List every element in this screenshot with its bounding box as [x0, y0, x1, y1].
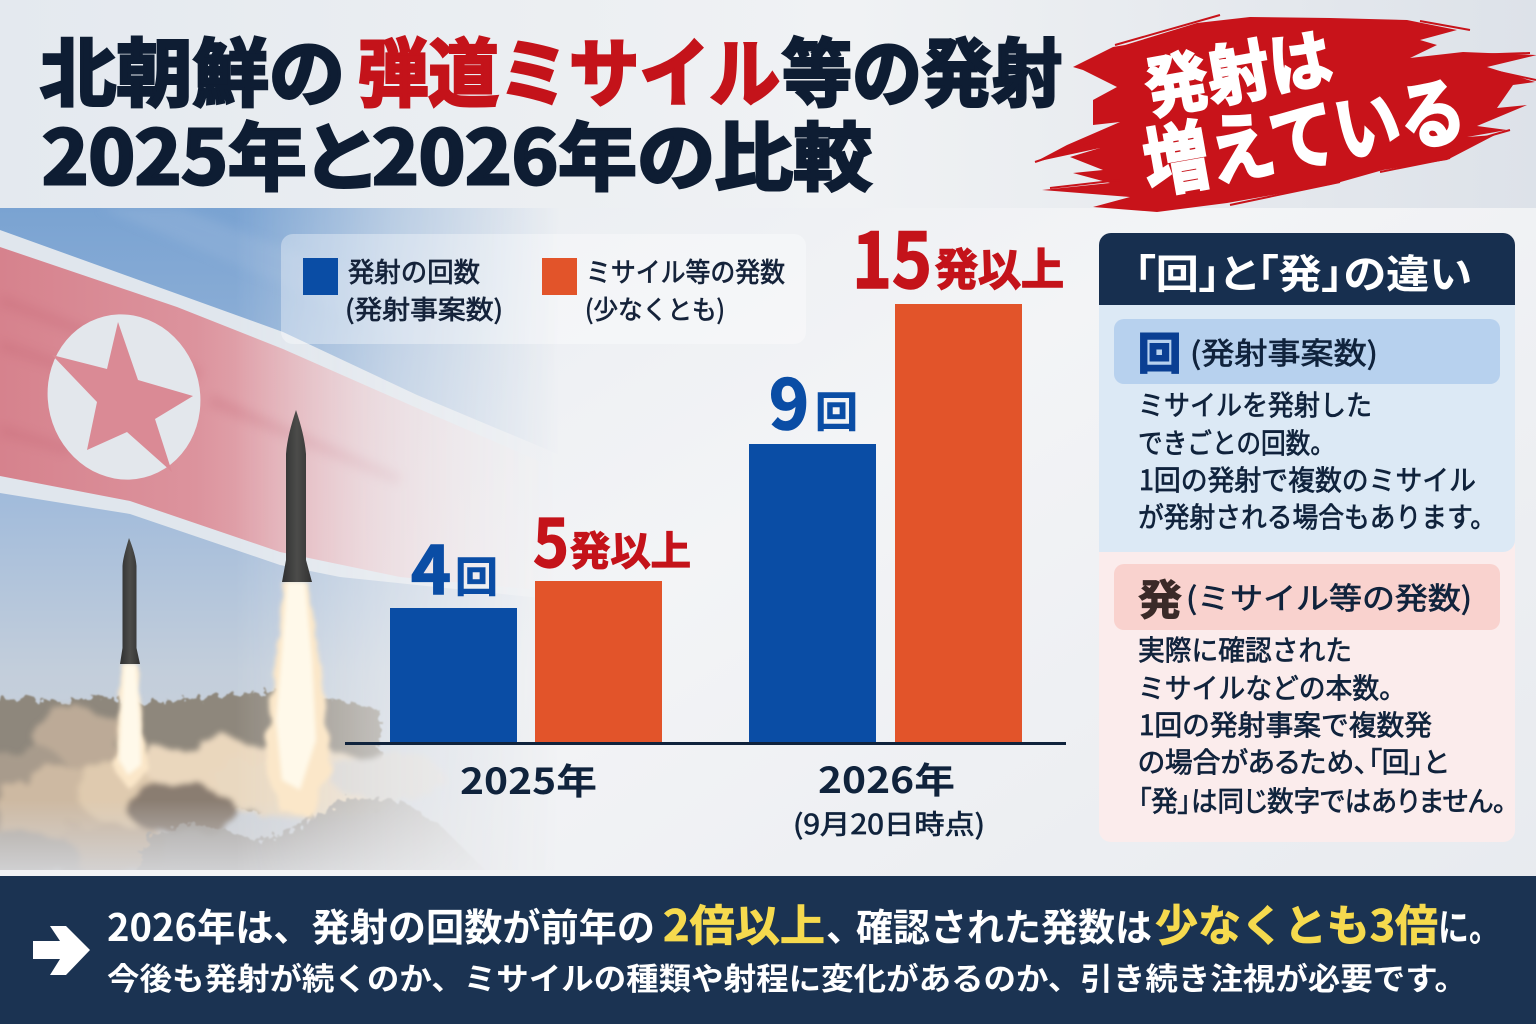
title: 2025年と2026年の比較 — [42, 99, 872, 206]
legend — [281, 234, 806, 344]
text block: 発 definition: 実際に確認された — [1138, 629, 1352, 669]
summary line 1: 2026年は、発射の回数が前年の — [107, 897, 655, 952]
legend: missiles — [542, 251, 785, 327]
text block: 発 definition: の場合があるため、「回」と — [1138, 741, 1448, 781]
subheading: 回: (発射事案数) — [1190, 329, 1378, 373]
axis label: 2026: 2026年 — [818, 752, 955, 804]
treeline — [0, 690, 380, 810]
foreground trees — [138, 794, 452, 870]
bar: 2026 launches — [749, 444, 876, 743]
summary line 2: 今後も発射が続くのか、ミサイルの種類や射程に変化があるのか、引き続き注視が必要です。 — [107, 954, 1467, 999]
title: 弾道ミサイル — [358, 15, 780, 122]
text block: 発 definition: 「発」は同じ数字ではありません。 — [1138, 780, 1506, 820]
callout text: 発射は — [1137, 6, 1339, 133]
panel header — [1099, 233, 1515, 305]
flame: large rocket — [266, 582, 332, 815]
panel header: 「回」と「発」の違い — [1134, 242, 1472, 300]
value: 9回 — [769, 350, 858, 449]
value: 15発以上: 発以上 — [935, 234, 1064, 298]
subheading: 発: (ミサイル等の発数) — [1186, 574, 1472, 618]
text block: 発 definition — [1138, 629, 1506, 820]
panel: difference between 回 and 発 — [1099, 233, 1515, 842]
section: 発 — [1114, 564, 1506, 820]
photo: flag and missile launch — [0, 208, 560, 885]
bar: 2026 missiles — [895, 304, 1022, 743]
title — [40, 15, 1062, 206]
icon: 発: 発 — [1138, 567, 1182, 628]
icon: arrow — [33, 926, 90, 975]
summary line 1: 2倍以上 — [663, 892, 825, 954]
bar chart — [345, 200, 1066, 842]
flame: small rocket — [114, 664, 148, 790]
smoke clouds — [0, 702, 384, 870]
text block: 回 definition — [1138, 384, 1496, 536]
value: 9回: 回 — [815, 379, 858, 440]
legend: launches: 発射の回数 — [348, 251, 480, 290]
legend: missiles: (少なくとも) — [585, 290, 725, 327]
text block: 回 definition: 1回の発射で複数のミサイル — [1139, 459, 1476, 499]
summary line 1: 、 — [826, 897, 864, 952]
flag emblem: white circle — [48, 314, 200, 480]
legend: launches: (発射事案数) — [345, 290, 503, 327]
value: 4回: 4 — [411, 518, 451, 614]
value: 4回 — [411, 518, 498, 614]
footer band — [0, 876, 1536, 1024]
flag — [0, 210, 520, 589]
text block: 回 definition: ミサイルを発射した — [1138, 384, 1372, 424]
callout text: 増えている — [1134, 49, 1473, 214]
missile: large — [282, 410, 312, 582]
value: 5発以上: 発以上 — [570, 519, 691, 577]
bar: 2025 launches — [390, 608, 517, 743]
summary line 1: 確認された発数は — [856, 897, 1152, 952]
value: 15発以上: 15 — [852, 200, 932, 310]
icon: 回: 回 — [1138, 320, 1181, 382]
summary line 1: に。 — [1438, 897, 1500, 952]
summary line 1 — [107, 892, 1500, 954]
text block: 回 definition: が発射される場合もあります。 — [1138, 496, 1496, 536]
value: 5発以上 — [533, 491, 691, 587]
value: 9回: 9 — [769, 350, 809, 449]
missile: small — [120, 538, 140, 664]
legend: launches — [303, 251, 503, 327]
axis label: 2026: (9月20日時点) — [793, 803, 985, 842]
callout: red brush stamp — [1035, 6, 1536, 214]
value: 5発以上: 5 — [533, 491, 569, 587]
axis label: 2026 — [793, 752, 985, 842]
flag emblem: red star — [52, 322, 193, 472]
bar: 2025 missiles — [535, 581, 662, 743]
legend: missiles: ミサイル等の発数 — [586, 251, 785, 290]
text block: 回 definition: できごとの回数。 — [1138, 422, 1335, 462]
value: 15発以上 — [852, 200, 1064, 310]
title: 北朝鮮の — [40, 15, 345, 122]
text block: 発 definition: ミサイルなどの本数。 — [1138, 667, 1406, 707]
summary line 1: 少なくとも3倍 — [1155, 892, 1438, 954]
axis label: 2025: 2025年 — [460, 753, 597, 805]
section: 回 — [1099, 305, 1515, 552]
value: 4回: 回 — [455, 544, 498, 605]
text block: 発 definition: 1回の発射事案で複数発 — [1139, 704, 1432, 744]
title: 等の発射 — [782, 15, 1062, 122]
